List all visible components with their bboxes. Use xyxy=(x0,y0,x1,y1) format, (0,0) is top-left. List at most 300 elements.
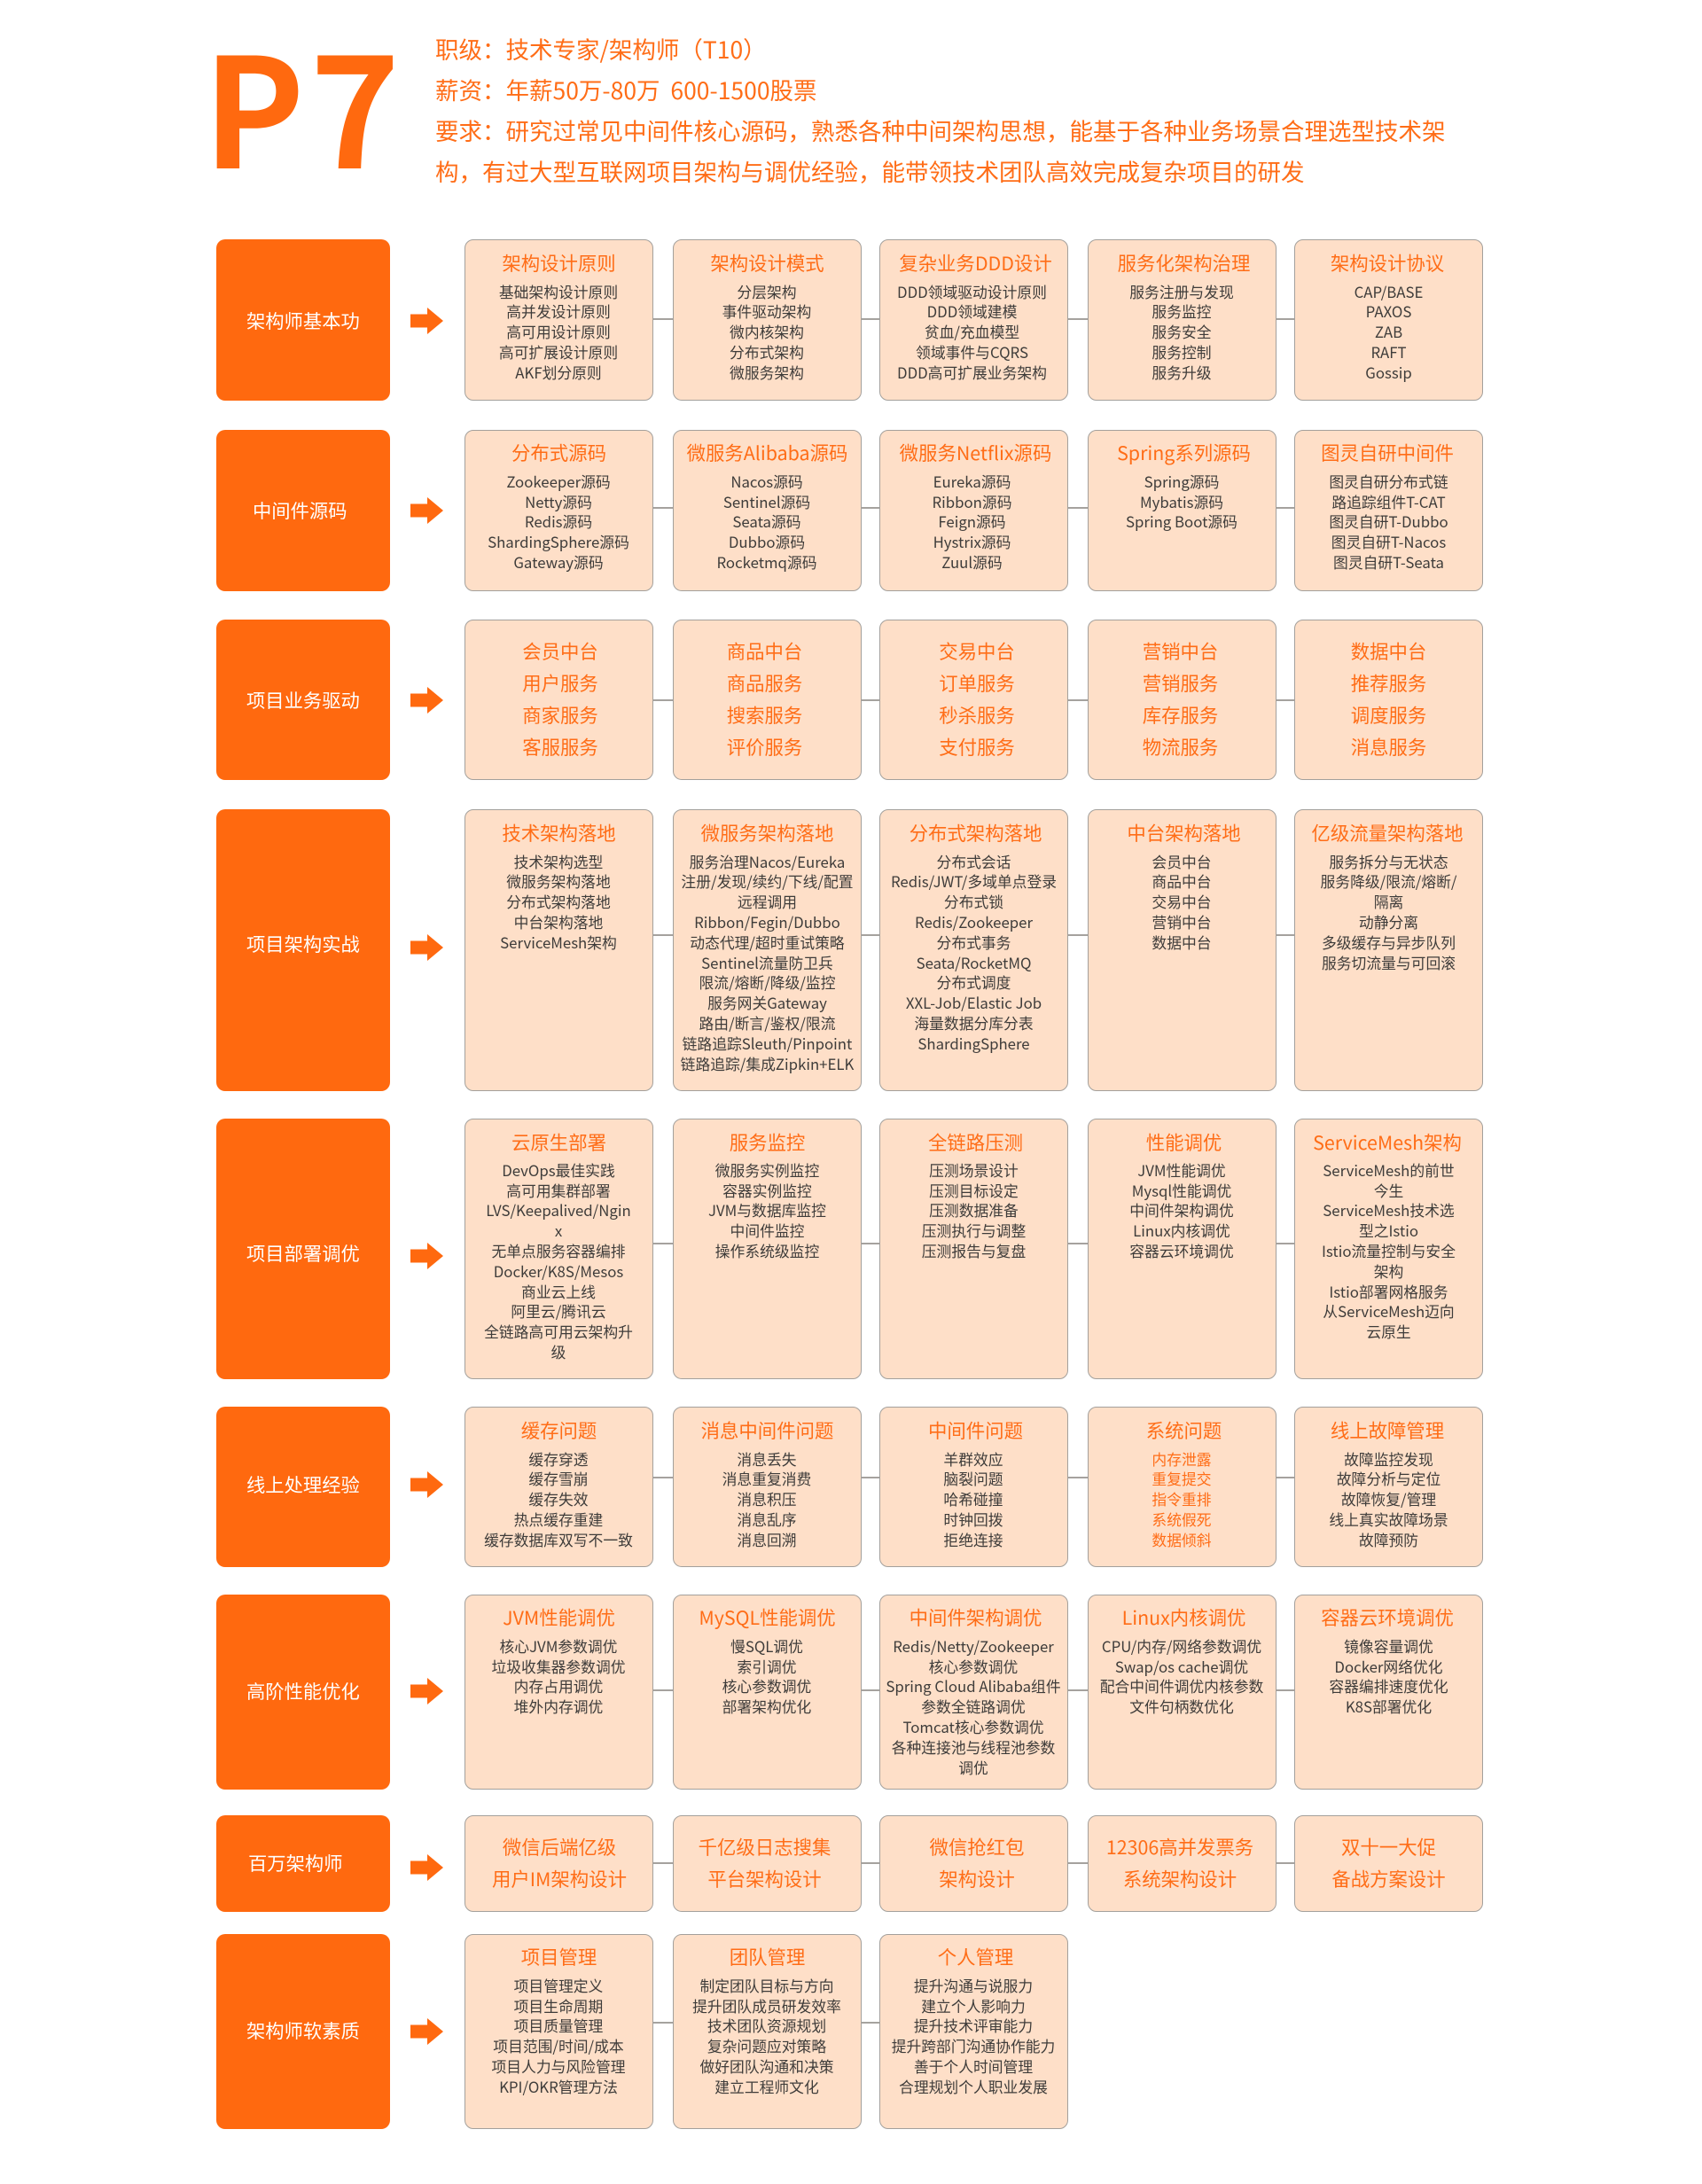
card: 微信抢红包架构设计 xyxy=(879,1815,1068,1912)
card: ServiceMesh架构: 今生 xyxy=(1374,1180,1403,1201)
card: 分布式架构落地: 分布式架构落地 xyxy=(910,819,1042,846)
card: 微服务Alibaba源码: Seata源码 xyxy=(732,511,801,532)
card: 商品中台: 评价服务 xyxy=(727,732,802,760)
card: 复杂业务DDD设计: DDD高可扩展业务架构 xyxy=(897,362,1047,383)
card: 云原生部署: x xyxy=(555,1220,562,1241)
card: 全链路压测: 压测场景设计 xyxy=(929,1159,1019,1181)
card: 架构设计协议: 架构设计协议 xyxy=(1331,248,1444,277)
card: 营销中台 xyxy=(1088,620,1276,780)
card: 中间件问题: 羊群效应 xyxy=(943,1448,1003,1470)
card: 线上故障管理: 故障预防 xyxy=(1359,1529,1418,1550)
card: 微服务Alibaba源码: Sentinel源码 xyxy=(723,491,810,512)
card: 线上故障管理: 故障恢复/管理 xyxy=(1341,1488,1436,1509)
card: 微服务架构落地: 限流/熔断/降级/监控 xyxy=(699,971,835,993)
card: 个人管理: 提升跨部门沟通协作能力 xyxy=(892,2035,1055,2056)
card: 千亿级日志搜集平台架构设计 xyxy=(673,1815,862,1912)
label: 高阶性能优化: 高阶性能优化 xyxy=(246,1677,360,1704)
card: 服务监控: 容器实例监控 xyxy=(722,1180,812,1201)
card: 全链路压测: 压测数据准备 xyxy=(929,1199,1019,1221)
card: 微服务Netflix源码: Ribbon源码 xyxy=(933,491,1011,512)
card: JVM性能调优: 垃圾收集器参数调优 xyxy=(491,1656,626,1677)
card: 消息中间件问题: 消息积压 xyxy=(737,1488,797,1509)
card: 微服务架构落地: 动态代理/超时重试策略 xyxy=(690,932,845,953)
card: 交易中台 xyxy=(879,620,1068,780)
arrow xyxy=(410,2018,443,2045)
card: 微信后端亿级用户IM架构设计 xyxy=(465,1815,653,1912)
card: 图灵自研中间件: 图灵自研中间件 xyxy=(1321,438,1454,466)
card: JVM性能调优: 堆外内存调优 xyxy=(514,1696,603,1717)
card: 团队管理 xyxy=(673,1934,862,2129)
card: 交易中台: 交易中台 xyxy=(939,636,1015,665)
card: 中间件架构调优: 中间件架构调优 xyxy=(910,1603,1042,1631)
card: 分布式架构落地: Seata/RocketMQ xyxy=(917,952,1031,973)
card: 图灵自研中间件 xyxy=(1294,430,1483,591)
arrow xyxy=(410,934,443,961)
card: 架构设计原则: 高可用设计原则 xyxy=(506,321,611,342)
card: 服务监控: 微服务实例监控 xyxy=(715,1159,819,1181)
arrow xyxy=(410,1678,443,1704)
card: 12306高并发票务系统架构设计: 系统架构设计 xyxy=(1123,1865,1237,1892)
card: MySQL性能调优: 慢SQL调优 xyxy=(730,1635,803,1657)
card: 交易中台: 秒杀服务 xyxy=(939,700,1015,729)
card: 微信后端亿级用户IM架构设计: 微信后端亿级 xyxy=(503,1833,616,1860)
label: 项目业务驱动 xyxy=(216,620,390,780)
card: 缓存问题: 缓存穿透 xyxy=(528,1448,589,1470)
card: 线上故障管理: 故障监控发现 xyxy=(1344,1448,1433,1470)
card: 架构设计模式: 微服务架构 xyxy=(730,362,804,383)
card: 商品中台: 商品服务 xyxy=(727,668,802,697)
card: 亿级流量架构落地 xyxy=(1294,809,1483,1091)
panel: 项目架构实战 row xyxy=(216,809,1483,1091)
card: Spring系列源码: Spring源码 xyxy=(1144,471,1219,492)
panel: 架构师基本功 row xyxy=(216,239,1483,401)
card: 消息中间件问题: 消息回溯 xyxy=(737,1529,797,1550)
card: 中间件架构调优: Spring Cloud Alibaba组件 xyxy=(886,1675,1061,1696)
card: 微服务架构落地: 服务网关Gateway xyxy=(707,992,827,1013)
card: 服务化架构治理: 服务控制 xyxy=(1152,341,1212,363)
card: 中台架构落地: 中台架构落地 xyxy=(1127,819,1241,846)
card: 营销中台: 营销中台 xyxy=(1143,636,1218,665)
card: 服务监控: 操作系统级监控 xyxy=(715,1240,819,1261)
card: 中间件问题: 中间件问题 xyxy=(928,1416,1023,1443)
card: 微服务Alibaba源码: 微服务Alibaba源码 xyxy=(687,438,847,466)
card: 云原生部署: 云原生部署 xyxy=(511,1127,606,1156)
card: 服务化架构治理: 服务化架构治理 xyxy=(1118,248,1250,277)
card: 云原生部署: DevOps最佳实践 xyxy=(502,1159,615,1181)
card: 中台架构落地: 会员中台 xyxy=(1152,851,1212,872)
card: 中台架构落地 xyxy=(1088,809,1276,1091)
card: 数据中台: 消息服务 xyxy=(1351,732,1426,760)
card: 系统问题 xyxy=(1088,1407,1276,1567)
card: 分布式架构落地: 海量数据分库分表 xyxy=(914,1012,1034,1034)
card: 中间件架构调优: 调优 xyxy=(958,1757,988,1778)
card: 消息中间件问题: 消息丢失 xyxy=(737,1448,797,1470)
card: 技术架构落地: 分布式架构落地 xyxy=(506,891,611,912)
label: 项目业务驱动: 项目业务驱动 xyxy=(246,686,360,714)
card: 系统问题: 指令重排 xyxy=(1152,1488,1212,1509)
card: JVM性能调优: 核心JVM参数调优 xyxy=(500,1635,617,1657)
card: 容器云环境调优: 镜像容量调优 xyxy=(1344,1635,1433,1657)
card: ServiceMesh架构: Istio流量控制与安全 xyxy=(1322,1240,1456,1261)
card: 线上故障管理: 线上故障管理 xyxy=(1331,1416,1444,1443)
header text block: level, salary, requirements: 构，有过大型互联网项目架构与调优经验，能带领技术团队高效完成复杂项目的研发 xyxy=(435,153,1305,188)
card: 中间件问题 xyxy=(879,1407,1068,1567)
panel: 项目部署调优 row xyxy=(216,1119,1483,1379)
card: 服务化架构治理 xyxy=(1088,239,1276,401)
card: 团队管理: 技术团队资源规划 xyxy=(707,2015,826,2036)
card: 图灵自研中间件: 图灵自研T-Dubbo xyxy=(1329,511,1448,532)
card: 团队管理: 制定团队目标与方向 xyxy=(699,1975,834,1996)
card: JVM性能调优: JVM性能调优 xyxy=(503,1603,615,1631)
card: Linux内核调优: 文件句柄数优化 xyxy=(1129,1696,1234,1717)
card: 消息中间件问题: 消息重复消费 xyxy=(722,1468,811,1489)
card: Linux内核调优: Swap/os cache调优 xyxy=(1115,1656,1248,1677)
label: 高阶性能优化 xyxy=(216,1595,390,1790)
card: 架构设计模式: 架构设计模式 xyxy=(710,248,824,277)
card: MySQL性能调优: 核心参数调优 xyxy=(722,1675,811,1696)
card: 中间件问题: 哈希碰撞 xyxy=(943,1488,1003,1509)
arrow xyxy=(410,497,443,524)
card: 分布式架构落地: Redis/JWT/多域单点登录 xyxy=(891,870,1057,892)
card: 双十一大促备战方案设计: 备战方案设计 xyxy=(1331,1865,1446,1892)
card: Linux内核调优: 配合中间件调优内核参数 xyxy=(1100,1675,1263,1696)
card: Spring系列源码: Mybatis源码 xyxy=(1140,491,1223,512)
card: 技术架构落地: 微服务架构落地 xyxy=(506,870,611,892)
card: 技术架构落地: ServiceMesh架构 xyxy=(500,932,617,953)
arrow xyxy=(410,1471,443,1498)
card: 微服务架构落地: 链路追踪Sleuth/Pinpoint xyxy=(683,1033,852,1054)
panel: 线上处理经验 row xyxy=(216,1407,1483,1567)
card: 项目管理: 项目质量管理 xyxy=(514,2015,603,2036)
card: 性能调优: 中间件架构调优 xyxy=(1129,1199,1234,1221)
card: 微服务架构落地 xyxy=(673,809,862,1091)
card: 微服务Alibaba源码 xyxy=(673,430,862,591)
card: 服务化架构治理: 服务监控 xyxy=(1152,300,1212,322)
card: 微服务Netflix源码 xyxy=(879,430,1068,591)
card: 全链路压测 xyxy=(879,1119,1068,1379)
card: 容器云环境调优: Docker网络优化 xyxy=(1334,1656,1443,1677)
card: 中间件架构调优: Redis/Netty/Zookeeper xyxy=(893,1635,1054,1657)
card: 分布式架构落地: 分布式会话 xyxy=(937,851,1011,872)
card: Linux内核调优 xyxy=(1088,1595,1276,1790)
card: 微服务架构落地: 服务治理Nacos/Eureka xyxy=(690,851,845,872)
card: 微服务架构落地: 注册/发现/续约/下线/配置 xyxy=(681,870,854,892)
label: 中间件源码 xyxy=(216,430,390,591)
card: 个人管理: 提升沟通与说服力 xyxy=(914,1975,1033,1996)
card: 容器云环境调优: K8S部署优化 xyxy=(1346,1696,1432,1717)
card: 微服务架构落地: 路由/断言/鉴权/限流 xyxy=(699,1012,835,1034)
card: 分布式架构落地: 分布式事务 xyxy=(937,932,1011,953)
card: 服务化架构治理: 服务注册与发现 xyxy=(1129,281,1234,302)
card: 分布式架构落地: ShardingSphere xyxy=(917,1033,1030,1054)
card: 云原生部署: 阿里云/腾讯云 xyxy=(511,1300,606,1322)
card: 项目管理: 项目人力与风险管理 xyxy=(491,2055,626,2077)
card: 团队管理: 复杂问题应对策略 xyxy=(707,2035,826,2056)
card: ServiceMesh架构: ServiceMesh架构 xyxy=(1313,1127,1462,1156)
card: 个人管理: 个人管理 xyxy=(938,1943,1013,1970)
card: 线上故障管理: 线上真实故障场景 xyxy=(1329,1509,1448,1530)
card: 项目管理 xyxy=(465,1934,653,2129)
card: 技术架构落地: 中台架构落地 xyxy=(514,911,603,932)
card: 消息中间件问题: 消息中间件问题 xyxy=(701,1416,833,1443)
card: 双十一大促备战方案设计: 双十一大促 xyxy=(1341,1833,1436,1860)
card: 12306高并发票务系统架构设计 xyxy=(1088,1815,1276,1912)
card: 缓存问题: 缓存数据库双写不一致 xyxy=(484,1529,633,1550)
card: MySQL性能调优: MySQL性能调优 xyxy=(699,1603,836,1631)
card: 微服务Alibaba源码: Dubbo源码 xyxy=(729,531,805,552)
card: 分布式架构落地 xyxy=(879,809,1068,1091)
card: 中台架构落地: 数据中台 xyxy=(1152,932,1212,953)
card: 中间件架构调优 xyxy=(879,1595,1068,1790)
card: 数据中台: 调度服务 xyxy=(1351,700,1426,729)
card: JVM性能调优 xyxy=(465,1595,653,1790)
card: 团队管理: 提升团队成员研发效率 xyxy=(692,1995,841,2016)
card: 微服务架构落地: Sentinel流量防卫兵 xyxy=(701,952,833,973)
card: 数据中台: 数据中台 xyxy=(1351,636,1426,665)
card: 亿级流量架构落地: 服务切流量与可回滚 xyxy=(1322,952,1456,973)
card: 项目管理: 项目范围/时间/成本 xyxy=(493,2035,624,2056)
card: 会员中台: 商家服务 xyxy=(522,700,598,729)
card: 团队管理: 团队管理 xyxy=(730,1943,805,1970)
header text block: level, salary, requirements: 薪资：年薪50万-80万 600-1500股票 xyxy=(435,72,817,106)
card: 分布式源码 xyxy=(465,430,653,591)
card: 缓存问题: 缓存问题 xyxy=(521,1416,597,1443)
card: 微信抢红包架构设计: 微信抢红包 xyxy=(930,1833,1024,1860)
arrow xyxy=(410,308,443,334)
card: 微服务架构落地: 微服务架构落地 xyxy=(701,819,833,846)
label: 架构师基本功: 架构师基本功 xyxy=(246,307,360,334)
card: 系统问题: 重复提交 xyxy=(1152,1468,1212,1489)
card: 架构设计协议: RAFT xyxy=(1370,341,1407,363)
card: 分布式源码: Gateway源码 xyxy=(513,551,604,573)
card: 性能调优: Linux内核调优 xyxy=(1133,1220,1230,1241)
card: 会员中台: 会员中台 xyxy=(522,636,598,665)
card: 技术架构落地 xyxy=(465,809,653,1091)
card: 千亿级日志搜集平台架构设计: 千亿级日志搜集 xyxy=(699,1833,831,1860)
card: 会员中台 xyxy=(465,620,653,780)
card: 个人管理: 建立个人影响力 xyxy=(921,1995,1026,2016)
card: 交易中台: 支付服务 xyxy=(939,732,1015,760)
card: 亿级流量架构落地: 服务降级/限流/熔断/ xyxy=(1321,870,1457,892)
card: 微服务架构落地: Ribbon/Fegin/Dubbo xyxy=(694,911,840,932)
card: 分布式架构落地: 分布式调度 xyxy=(937,971,1011,993)
card: 性能调优: Mysql性能调优 xyxy=(1132,1180,1231,1201)
card: 双十一大促备战方案设计 xyxy=(1294,1815,1483,1912)
card: 图灵自研中间件: 图灵自研T-Nacos xyxy=(1331,531,1446,552)
card: 全链路压测: 压测目标设定 xyxy=(929,1180,1019,1201)
header text block: level, salary, requirements: 要求：研究过常见中间件核心源码，熟悉各种中间架构思想，能基于各种业务场景合理选型技术架 xyxy=(435,113,1445,147)
label: 项目架构实战 xyxy=(216,809,390,1091)
card: 千亿级日志搜集平台架构设计: 平台架构设计 xyxy=(707,1865,822,1892)
card: 系统问题: 系统假死 xyxy=(1152,1509,1212,1530)
panel: 项目业务驱动 row xyxy=(216,620,1483,780)
card: 个人管理: 善于个人时间管理 xyxy=(914,2055,1033,2077)
card: 会员中台: 客服服务 xyxy=(522,732,598,760)
card: ServiceMesh架构: 从ServiceMesh迈向 xyxy=(1323,1300,1455,1322)
card: 复杂业务DDD设计: 领域事件与CQRS xyxy=(916,341,1028,363)
card: 缓存问题: 热点缓存重建 xyxy=(514,1509,603,1530)
card: ServiceMesh架构: Istio部署网格服务 xyxy=(1329,1281,1448,1302)
card: 性能调优: JVM性能调优 xyxy=(1137,1159,1226,1181)
card: 架构设计原则: 高可扩展设计原则 xyxy=(499,341,618,363)
card: ServiceMesh架构: 型之Istio xyxy=(1359,1220,1418,1241)
label: 架构师软素质: 架构师软素质 xyxy=(246,2016,360,2044)
card: 服务监控: 服务监控 xyxy=(730,1127,805,1156)
label: 架构师软素质 xyxy=(216,1934,390,2129)
label: 项目架构实战: 项目架构实战 xyxy=(246,930,360,957)
card: 中间件架构调优: 参数全链路调优 xyxy=(921,1696,1026,1717)
card: 架构设计原则: 架构设计原则 xyxy=(502,248,616,277)
card: 分布式架构落地: Redis/Zookeeper xyxy=(915,911,1033,932)
card: 线上故障管理 xyxy=(1294,1407,1483,1567)
card: 个人管理: 提升技术评审能力 xyxy=(914,2015,1033,2036)
arrow xyxy=(410,1854,443,1881)
card: 技术架构落地: 技术架构选型 xyxy=(514,851,603,872)
card: 服务化架构治理: 服务安全 xyxy=(1152,321,1212,342)
card: 复杂业务DDD设计 xyxy=(879,239,1068,401)
card: 云原生部署: 级 xyxy=(551,1341,566,1362)
card: 云原生部署: 全链路高可用云架构升 xyxy=(484,1321,633,1342)
card: 缓存问题: 缓存雪崩 xyxy=(528,1468,589,1489)
card: 容器云环境调优: 容器云环境调优 xyxy=(1321,1603,1454,1631)
card: 微服务Alibaba源码: Rocketmq源码 xyxy=(716,551,817,573)
card: 缓存问题: 缓存失效 xyxy=(528,1488,589,1509)
card: 架构设计模式: 分层架构 xyxy=(737,281,797,302)
card: 微服务Netflix源码: Eureka源码 xyxy=(933,471,1011,492)
card: 架构设计协议: CAP/BASE xyxy=(1355,281,1423,302)
header text block: level, salary, requirements: 职级：技术专家/架构师（T10） xyxy=(435,31,767,66)
label: 线上处理经验: 线上处理经验 xyxy=(246,1470,360,1498)
card: 容器云环境调优: 容器编排速度优化 xyxy=(1329,1675,1448,1696)
card: 微服务架构落地: 链路追踪/集成Zipkin+ELK xyxy=(681,1053,854,1074)
card: 中间件架构调优: 各种连接池与线程池参数 xyxy=(892,1736,1055,1758)
card: 分布式源码: Redis源码 xyxy=(525,511,592,532)
card: ServiceMesh架构: 云原生 xyxy=(1366,1321,1411,1342)
card: 架构设计模式: 分布式架构 xyxy=(730,341,804,363)
panel: 架构师软素质 row xyxy=(216,1934,1068,2129)
card: 架构设计原则: 高并发设计原则 xyxy=(506,300,611,322)
card: 商品中台: 商品中台 xyxy=(727,636,802,665)
card: 架构设计协议: Gossip xyxy=(1365,362,1412,383)
card: 服务监控 xyxy=(673,1119,862,1379)
card: 分布式源码: Netty源码 xyxy=(525,491,592,512)
card: 图灵自研中间件: 路追踪组件T-CAT xyxy=(1331,491,1446,512)
card: 亿级流量架构落地: 多级缓存与异步队列 xyxy=(1322,932,1456,953)
card: ServiceMesh架构: ServiceMesh技术选 xyxy=(1323,1199,1455,1221)
card: 容器云环境调优 xyxy=(1294,1595,1483,1790)
card: 全链路压测: 压测报告与复盘 xyxy=(922,1240,1026,1261)
card: 云原生部署: LVS/Keepalived/Ngin xyxy=(486,1199,631,1221)
card: 分布式源码: ShardingSphere源码 xyxy=(488,531,629,552)
card: 复杂业务DDD设计: DDD领域驱动设计原则 xyxy=(897,281,1047,302)
card: 个人管理: 合理规划个人职业发展 xyxy=(899,2076,1048,2097)
card: 数据中台: 推荐服务 xyxy=(1351,668,1426,697)
card: 微信后端亿级用户IM架构设计: 用户IM架构设计 xyxy=(492,1865,627,1892)
card: 云原生部署: 商业云上线 xyxy=(521,1281,596,1302)
card: 分布式架构落地: XXL-Job/Elastic Job xyxy=(906,992,1042,1013)
card: 团队管理: 做好团队沟通和决策 xyxy=(699,2055,834,2077)
card: 分布式源码: 分布式源码 xyxy=(511,438,606,466)
card: 云原生部署: Docker/K8S/Mesos xyxy=(494,1260,623,1282)
card: 微服务Netflix源码: Zuul源码 xyxy=(941,551,1003,573)
card: MySQL性能调优: 索引调优 xyxy=(737,1656,797,1677)
label: 线上处理经验 xyxy=(216,1407,390,1567)
panel: 中间件源码 row xyxy=(216,430,1483,591)
card: 架构设计原则 xyxy=(465,239,653,401)
card: ServiceMesh架构: 架构 xyxy=(1374,1260,1403,1282)
card: 消息中间件问题: 消息乱序 xyxy=(737,1509,797,1530)
card: 团队管理: 建立工程师文化 xyxy=(714,2076,819,2097)
card: 中间件问题: 时钟回拨 xyxy=(943,1509,1003,1530)
card: 交易中台: 订单服务 xyxy=(939,668,1015,697)
arrow xyxy=(410,1243,443,1269)
card: 图灵自研中间件: 图灵自研T-Seata xyxy=(1333,551,1444,573)
panel: 百万架构师 row xyxy=(216,1815,1483,1912)
card: 架构设计模式: 微内核架构 xyxy=(730,321,804,342)
card: 架构设计协议 xyxy=(1294,239,1483,401)
card: 性能调优: 容器云环境调优 xyxy=(1129,1240,1234,1261)
card: 会员中台: 用户服务 xyxy=(522,668,598,697)
label: 百万架构师 xyxy=(216,1815,390,1912)
card: 技术架构落地: 技术架构落地 xyxy=(502,819,616,846)
card: 项目管理: 项目管理定义 xyxy=(514,1975,603,1996)
card: 中台架构落地: 商品中台 xyxy=(1152,870,1212,892)
card: 中间件架构调优: Tomcat核心参数调优 xyxy=(902,1716,1044,1737)
card: 架构设计原则: AKF划分原则 xyxy=(515,362,602,383)
card: 架构设计协议: PAXOS xyxy=(1366,300,1411,322)
card: 云原生部署: 高可用集群部署 xyxy=(506,1180,611,1201)
card: 系统问题: 系统问题 xyxy=(1146,1416,1222,1443)
card: 复杂业务DDD设计: 贫血/充血模型 xyxy=(925,321,1019,342)
label: 中间件源码: 中间件源码 xyxy=(253,496,347,524)
card: 亿级流量架构落地: 动静分离 xyxy=(1359,911,1418,932)
card: 服务监控: JVM与数据库监控 xyxy=(708,1199,826,1221)
card: 中台架构落地: 营销中台 xyxy=(1152,911,1212,932)
card: 亿级流量架构落地: 服务拆分与无状态 xyxy=(1329,851,1448,872)
card: 项目管理: KPI/OKR管理方法 xyxy=(499,2076,618,2097)
card: 微信抢红包架构设计: 架构设计 xyxy=(939,1865,1015,1892)
card: Spring系列源码: Spring Boot源码 xyxy=(1126,511,1237,532)
card: 架构设计模式: 事件驱动架构 xyxy=(722,300,811,322)
card: 云原生部署 xyxy=(465,1119,653,1379)
card: 数据中台 xyxy=(1294,620,1483,780)
card: 性能调优: 性能调优 xyxy=(1146,1127,1222,1156)
card: 消息中间件问题 xyxy=(673,1407,862,1567)
card: 分布式架构落地: 分布式锁 xyxy=(944,891,1003,912)
card: 全链路压测: 压测执行与调整 xyxy=(922,1220,1026,1241)
card: 营销中台: 物流服务 xyxy=(1143,732,1218,760)
card: 缓存问题 xyxy=(465,1407,653,1567)
card: 微服务Netflix源码: Hystrix源码 xyxy=(933,531,1011,552)
card: 项目管理: 项目生命周期 xyxy=(514,1995,603,2016)
panel: 高阶性能优化 row xyxy=(216,1595,1483,1790)
card: 服务监控: 中间件监控 xyxy=(730,1220,804,1241)
card: 项目管理: 项目管理 xyxy=(521,1943,597,1970)
card: 系统问题: 数据倾斜 xyxy=(1152,1529,1212,1550)
card: JVM性能调优: 内存占用调优 xyxy=(514,1675,603,1696)
card: Spring系列源码 xyxy=(1088,430,1276,591)
card: 微服务架构落地: 远程调用 xyxy=(738,891,797,912)
label: 百万架构师: 百万架构师 xyxy=(248,1849,342,1876)
card: 亿级流量架构落地: 亿级流量架构落地 xyxy=(1311,819,1464,846)
card: 中间件架构调优: 核心参数调优 xyxy=(929,1656,1018,1677)
card: ServiceMesh架构 xyxy=(1294,1119,1483,1379)
label: 架构师基本功 xyxy=(216,239,390,401)
card: 复杂业务DDD设计: DDD领域建模 xyxy=(927,300,1017,322)
card: Spring系列源码: Spring系列源码 xyxy=(1117,438,1251,466)
card: 营销中台: 营销服务 xyxy=(1143,668,1218,697)
header text block: level, salary, requirements xyxy=(435,31,1445,188)
